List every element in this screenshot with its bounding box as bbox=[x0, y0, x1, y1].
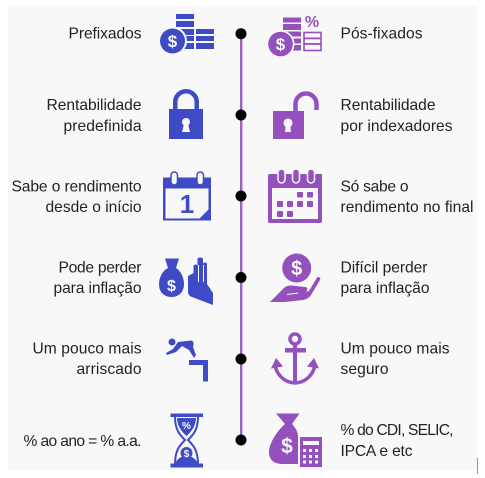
text: Difícil perder para inflação: para inflação bbox=[340, 280, 430, 297]
icon: coins with dollar: $ bbox=[168, 32, 178, 51]
text: Um pouco mais seguro bbox=[340, 340, 450, 378]
text: % do CDI, SELIC, IPCA e etc bbox=[340, 422, 454, 460]
icon: coins with dollar bbox=[158, 14, 214, 56]
text: Um pouco mais arriscado: Um pouco mais bbox=[32, 340, 142, 358]
text: % ao ano = % a.a.: % ao ano = % a.a. bbox=[24, 433, 142, 450]
text: Só sabe o rendimento no final bbox=[340, 178, 474, 216]
text: Um pouco mais seguro: seguro bbox=[340, 361, 389, 378]
text: Só sabe o rendimento no final: Só sabe o bbox=[340, 178, 409, 196]
text: Um pouco mais arriscado bbox=[32, 340, 142, 378]
icon: calendar with number 1: 1 bbox=[180, 189, 194, 219]
text: Difícil perder para inflação: Difícil perder bbox=[340, 260, 428, 276]
icon: money bag and calculator bbox=[269, 414, 322, 467]
icon: anchor bbox=[271, 334, 319, 383]
text: Difícil perder para inflação bbox=[340, 260, 430, 297]
text: Pode perder para inflação: para inflação bbox=[54, 280, 142, 297]
icon: coins with percent: % bbox=[305, 14, 319, 31]
icon: coins with percent: $ bbox=[276, 35, 286, 54]
timeline bbox=[236, 28, 246, 445]
icon: hourglass with percent and dollar bbox=[170, 414, 203, 468]
icon: hourglass with percent and dollar: $ bbox=[184, 449, 190, 460]
icon: hand holding coin bbox=[270, 254, 320, 302]
text: % do CDI, SELIC, IPCA e etc: % do CDI, SELIC, bbox=[340, 422, 454, 439]
text: Pode perder para inflação bbox=[54, 260, 142, 297]
icon: closed padlock bbox=[169, 91, 203, 139]
icon: calendar with dots bbox=[268, 169, 322, 223]
text: Rentabilidade por indexadores: por indexadores bbox=[340, 118, 453, 135]
text: % do CDI, SELIC, IPCA e etc: IPCA e etc bbox=[340, 443, 413, 460]
text: Prefixados: Prefixados bbox=[68, 26, 142, 42]
text: Um pouco mais seguro: Um pouco mais bbox=[340, 340, 450, 358]
text: Rentabilidade por indexadores bbox=[340, 97, 453, 135]
icon: hand holding coin: $ bbox=[291, 258, 302, 280]
icon: hourglass with percent and dollar: % bbox=[182, 421, 191, 432]
icon: money bag and hand bbox=[159, 258, 213, 305]
text: Sabe o rendimento desde o início: Sabe o rendimento bbox=[12, 178, 142, 196]
text: Sabe o rendimento desde o início bbox=[12, 178, 142, 216]
text: Rentabilidade predefinida: predefinida bbox=[64, 118, 142, 135]
icon: calendar with number 1 bbox=[163, 172, 211, 220]
text: Sabe o rendimento desde o início: desde o início bbox=[46, 199, 142, 216]
text: Um pouco mais arriscado: arriscado bbox=[76, 361, 142, 378]
text: Pós-fixados: Pós-fixados bbox=[340, 26, 423, 42]
text: Rentabilidade predefinida bbox=[46, 97, 142, 135]
text: Rentabilidade predefinida: Rentabilidade bbox=[46, 97, 142, 114]
icon: money bag and hand: $ bbox=[167, 278, 176, 295]
icon: open padlock bbox=[273, 94, 316, 139]
text: Pode perder para inflação: Pode perder bbox=[58, 260, 142, 276]
icon: figure on the edge of a step bbox=[166, 338, 208, 382]
icon: money bag and calculator: $ bbox=[281, 435, 293, 458]
text: Só sabe o rendimento no final: rendimento no final bbox=[340, 199, 474, 216]
icon: coins with percent bbox=[266, 14, 321, 58]
text: Rentabilidade por indexadores: Rentabilidade bbox=[340, 97, 436, 114]
